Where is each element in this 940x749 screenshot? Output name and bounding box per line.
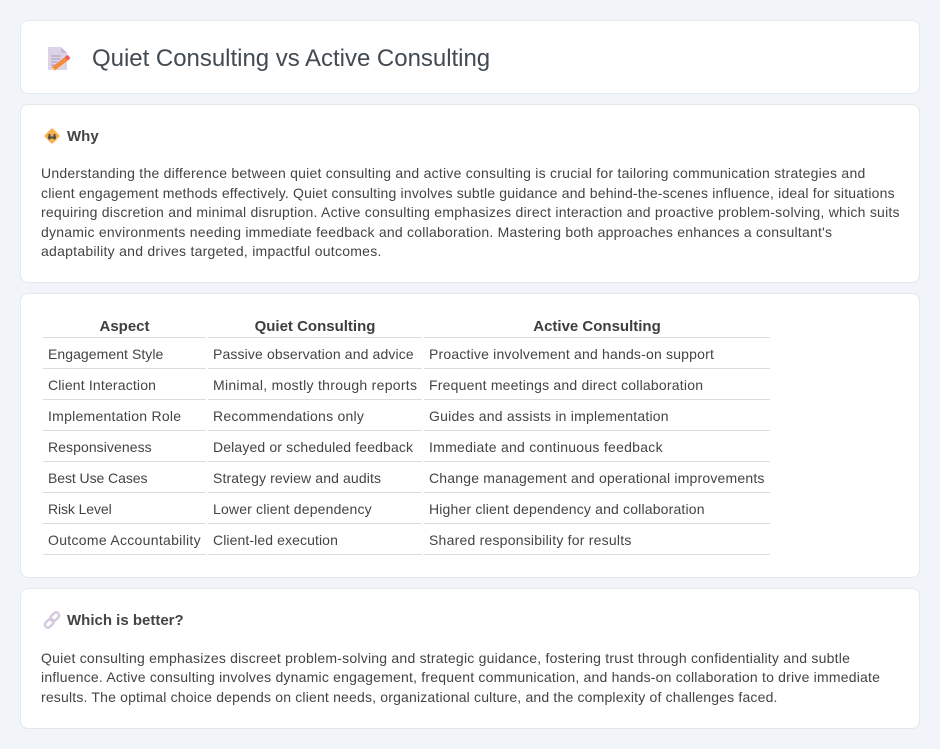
panel: why: [20, 104, 920, 283]
table header: Quiet Consulting: [255, 318, 375, 335]
table row: responsiveness: Responsiveness: [48, 439, 152, 455]
table row: risk level: Higher client dependency and collaboration: [429, 501, 705, 517]
table header: Active Consulting: [533, 318, 661, 335]
table row: implementation role: Guides and assists in implementation: [429, 408, 669, 424]
table header: Aspect: [99, 318, 150, 335]
text block: which is better paragraph: influence. Active consulting involves dynamic engagement, frequent communication, and hands-on collaboration to drive immediate: [41, 669, 880, 685]
table row: client interaction: Client Interaction: [48, 377, 156, 393]
text block: why paragraph: adaptability and drives targeted, impactful outcomes.: [41, 243, 382, 259]
table row: risk level: Risk Level: [48, 501, 112, 517]
table row: client interaction: Minimal, mostly through reports: [213, 377, 417, 393]
table row: implementation role: Implementation Role: [48, 408, 181, 424]
table row: responsiveness: [43, 439, 770, 462]
table row: outcome accountability: Client-led execution: [213, 532, 338, 548]
table row: client interaction: Frequent meetings and direct collaboration: [429, 377, 703, 393]
title: Quiet Consulting vs Active Consulting: [92, 45, 490, 72]
text block: why paragraph: Understanding the difference between quiet consulting and active consulting is crucial for tailoring communication strategies and: [41, 165, 866, 181]
table row: engagement style: [43, 346, 770, 369]
icon: warning diamond: [44, 128, 60, 144]
table row: implementation role: Recommendations only: [213, 408, 364, 424]
table row: outcome accountability: [43, 532, 770, 555]
table row: engagement style: Passive observation and advice: [213, 346, 414, 362]
panel: which is better: [20, 588, 920, 729]
panel: comparison table: [20, 293, 920, 578]
table row: best use cases: Best Use Cases: [48, 470, 147, 486]
heading: which is better: Which is better?: [67, 612, 184, 629]
icon: document with pencil: [48, 47, 70, 71]
table row: engagement style: Engagement Style: [48, 346, 163, 362]
text block: which is better paragraph: [41, 650, 880, 705]
table row: best use cases: [43, 470, 770, 493]
icon: chain link: [44, 611, 60, 629]
text block: which is better paragraph: Quiet consulting emphasizes discreet problem-solving and strategic guidance, fostering trust through confidentiality and subtle: [41, 650, 850, 666]
text block: why paragraph: requiring discretion and minimal disruption. Active consulting emphasizes direct interaction and proactive problem-solving, which suits: [41, 204, 900, 220]
text block: why paragraph: [41, 165, 900, 259]
text block: which is better paragraph: results. The optimal choice depends on client needs, organizational culture, and the complexity of challenges faced.: [41, 689, 778, 705]
table row: best use cases: Change management and operational improvements: [429, 470, 765, 486]
table row: engagement style: Proactive involvement and hands-on support: [429, 346, 714, 362]
table row: client interaction: [43, 377, 770, 400]
text block: why paragraph: dynamic environments needing immediate feedback and collaboration. Mastering both approaches enhances a consultant's: [41, 224, 832, 240]
table row: best use cases: Strategy review and audits: [213, 470, 381, 486]
table row: outcome accountability: Shared responsibility for results: [429, 532, 632, 548]
table header: [43, 318, 770, 338]
panel: header: [20, 20, 920, 94]
table row: outcome accountability: Outcome Accountability: [48, 532, 201, 548]
table row: responsiveness: Delayed or scheduled feedback: [213, 439, 413, 455]
heading: why: Why: [67, 128, 99, 145]
table row: risk level: Lower client dependency: [213, 501, 372, 517]
text block: why paragraph: client engagement methods effectively. Quiet consulting involves subtle guidance and behind-the-scenes influence, ideal for situations: [41, 185, 895, 201]
table row: responsiveness: Immediate and continuous feedback: [429, 439, 663, 455]
table row: risk level: [43, 501, 770, 524]
table row: implementation role: [43, 408, 770, 431]
